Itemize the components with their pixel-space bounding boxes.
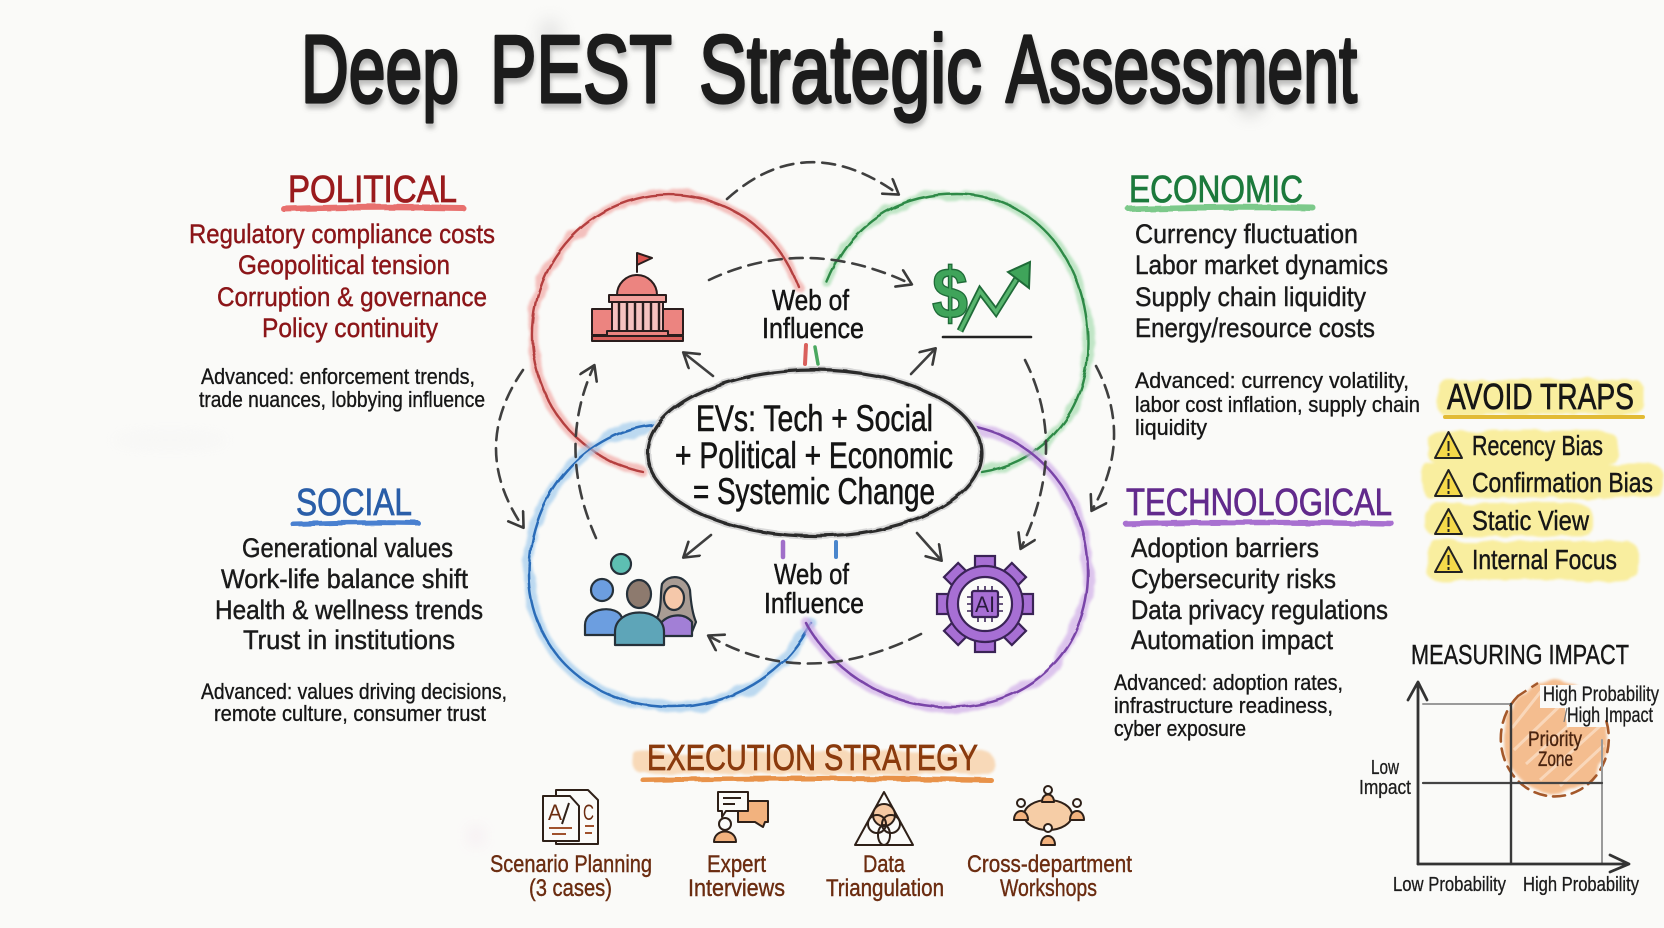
trap: static view: Static View — [1472, 505, 1590, 536]
step: expert interviews: Interviews — [688, 875, 785, 902]
center statement: = Systemic Change — [693, 471, 935, 512]
trap: internal focus: Internal Focus — [1472, 544, 1617, 575]
social advanced note: Advanced: values driving decisions, — [201, 679, 507, 704]
social underline — [293, 523, 418, 524]
title — [301, 16, 1357, 123]
economic factors: Energy/resource costs — [1135, 313, 1375, 343]
technological heading: TECHNOLOGICAL — [1126, 482, 1392, 524]
center statement: EVs: Tech + Social — [696, 398, 933, 439]
political factors — [189, 219, 495, 343]
arrow to political icon — [684, 353, 713, 376]
economic factors — [1135, 219, 1388, 343]
technological factors — [1131, 533, 1388, 655]
execution underline — [643, 778, 991, 780]
technological factors: Adoption barriers — [1131, 533, 1319, 563]
arrow to economic icon — [911, 349, 935, 374]
title: Strategic — [699, 16, 982, 123]
economic advanced note: Advanced: currency volatility, — [1135, 368, 1409, 393]
icon: AI gear — [937, 556, 1033, 652]
priority zone label: Zone — [1538, 748, 1573, 771]
trap: static view — [1435, 505, 1590, 536]
diagram: four overlapping circles — [529, 194, 1088, 707]
center statement: + Political + Economic — [675, 435, 953, 476]
social advanced note: remote culture, consumer trust — [214, 701, 486, 726]
title: Assessment — [1006, 16, 1357, 123]
social advanced note — [201, 679, 507, 726]
icon: scenario documents — [543, 790, 598, 844]
economic advanced note: labor cost inflation, supply chain — [1135, 392, 1420, 417]
priority zone label: Priority — [1528, 728, 1582, 751]
political heading: POLITICAL — [288, 169, 457, 211]
x axis labels: High Probability — [1523, 874, 1639, 896]
priority zone — [1501, 681, 1664, 796]
red circle — [533, 195, 806, 472]
short arrows from center — [684, 349, 941, 560]
label: web of influence top: Influence — [762, 313, 864, 345]
step: data triangulation: Data — [863, 851, 906, 878]
technological underline — [1126, 522, 1392, 524]
political underline — [284, 207, 463, 209]
step: scenario planning — [490, 851, 652, 902]
panel: avoid traps — [1422, 376, 1662, 581]
dashed influence arrows — [496, 162, 1114, 664]
arrow to social icon — [684, 535, 711, 557]
step: cross-department workshops: Workshops — [1000, 875, 1097, 902]
political advanced note: trade nuances, lobbying influence — [199, 387, 485, 412]
icon: scenario documents: A — [548, 800, 562, 825]
technological factors: Cybersecurity risks — [1131, 564, 1336, 594]
label: web of influence bottom: Influence — [764, 588, 864, 620]
y axis label: Low — [1371, 757, 1399, 779]
icon: workshop table — [1014, 786, 1084, 845]
background smudges — [110, 18, 1266, 845]
x axis labels — [1393, 874, 1639, 896]
purple circle — [783, 427, 1088, 707]
economic heading: ECONOMIC — [1129, 169, 1303, 211]
political factors: Geopolitical tension — [238, 250, 450, 280]
step: scenario planning: (3 cases) — [529, 875, 612, 902]
y axis label — [1359, 757, 1411, 799]
icon: group of people — [585, 554, 696, 645]
social factors — [215, 533, 483, 655]
label: web of influence top: Web of — [772, 285, 850, 317]
execution highlight — [634, 752, 994, 774]
icon: AI gear: AI — [975, 592, 995, 617]
step: cross-department workshops — [967, 851, 1132, 902]
x axis labels: Low Probability — [1393, 874, 1506, 896]
economic underline — [1129, 207, 1313, 209]
yellow highlights — [1422, 380, 1662, 581]
icon: government building — [592, 253, 683, 341]
icon: scenario documents: C — [583, 800, 594, 825]
panel: measuring impact — [1359, 639, 1664, 896]
step: cross-department workshops: Cross-department — [967, 851, 1132, 878]
title: PEST — [490, 16, 672, 123]
social factors: Health & wellness trends — [215, 595, 483, 625]
political advanced note — [199, 364, 485, 412]
economic factors: Supply chain liquidity — [1135, 282, 1366, 312]
social factors: Work-life balance shift — [221, 564, 468, 594]
arrow: political to economic outer — [727, 162, 898, 199]
step: expert interviews — [688, 851, 785, 902]
blue circle — [529, 425, 836, 707]
green circle — [815, 194, 1088, 472]
panel: technological — [1114, 482, 1392, 741]
arrow: political to social outer — [496, 370, 523, 527]
economic factors: Currency fluctuation — [1135, 219, 1358, 249]
economic factors: Labor market dynamics — [1135, 250, 1388, 280]
political factors: Regulatory compliance costs — [189, 219, 495, 249]
label: web of influence top — [762, 285, 864, 345]
icon: dollar and growth arrow — [932, 254, 1031, 337]
step: data triangulation — [826, 851, 944, 902]
technological advanced note: Advanced: adoption rates, — [1114, 670, 1343, 695]
technological factors: Data privacy regulations — [1131, 595, 1388, 625]
technological factors: Automation impact — [1131, 625, 1333, 655]
trap: recency bias: Recency Bias — [1472, 430, 1603, 461]
panel: political — [189, 169, 495, 412]
priority zone label — [1528, 728, 1582, 771]
high probability high impact label — [1543, 683, 1659, 727]
economic advanced note: liquidity — [1135, 415, 1207, 440]
y axis label: Impact — [1359, 777, 1411, 799]
title: Deep — [301, 16, 459, 123]
label: web of influence bottom: Web of — [774, 559, 850, 591]
arrow: economic to technological inner — [1021, 360, 1046, 548]
panel: social — [201, 482, 507, 726]
center statement — [675, 398, 953, 512]
panel: economic — [1129, 169, 1420, 440]
center ellipse — [648, 370, 982, 536]
social heading: SOCIAL — [296, 482, 412, 524]
political advanced note: Advanced: enforcement trends, — [201, 364, 475, 389]
arrow: economic to technological outer — [1092, 366, 1114, 510]
technological advanced note: cyber exposure — [1114, 716, 1246, 741]
arrow: technological to social — [709, 634, 921, 664]
arrow: social to political inner — [575, 366, 596, 538]
political factors: Policy continuity — [262, 313, 438, 343]
step: scenario planning: Scenario Planning — [490, 851, 652, 878]
economic advanced note — [1135, 368, 1420, 440]
impact grid and axes — [1408, 682, 1629, 872]
social factors: Generational values — [242, 533, 453, 563]
icon: expert interviews — [714, 792, 768, 842]
step: expert interviews: Expert — [707, 851, 766, 878]
technological advanced note — [1114, 670, 1343, 741]
avoid traps underline — [1445, 415, 1643, 419]
political factors: Corruption & governance — [217, 282, 487, 312]
label: web of influence bottom — [764, 559, 864, 620]
icon: data triangulation — [855, 792, 913, 845]
trap: internal focus — [1435, 544, 1617, 575]
step: data triangulation: Triangulation — [826, 875, 944, 902]
execution heading: EXECUTION STRATEGY — [647, 737, 978, 778]
arrow to technological icon — [917, 533, 941, 560]
arrow: political to economic inner — [709, 258, 911, 284]
panel: execution strategy — [490, 737, 1132, 902]
technological advanced note: infrastructure readiness, — [1114, 693, 1333, 718]
icon: dollar and growth arrow: $ — [932, 254, 968, 334]
trap: recency bias — [1435, 430, 1603, 461]
social factors: Trust in institutions — [243, 625, 455, 655]
